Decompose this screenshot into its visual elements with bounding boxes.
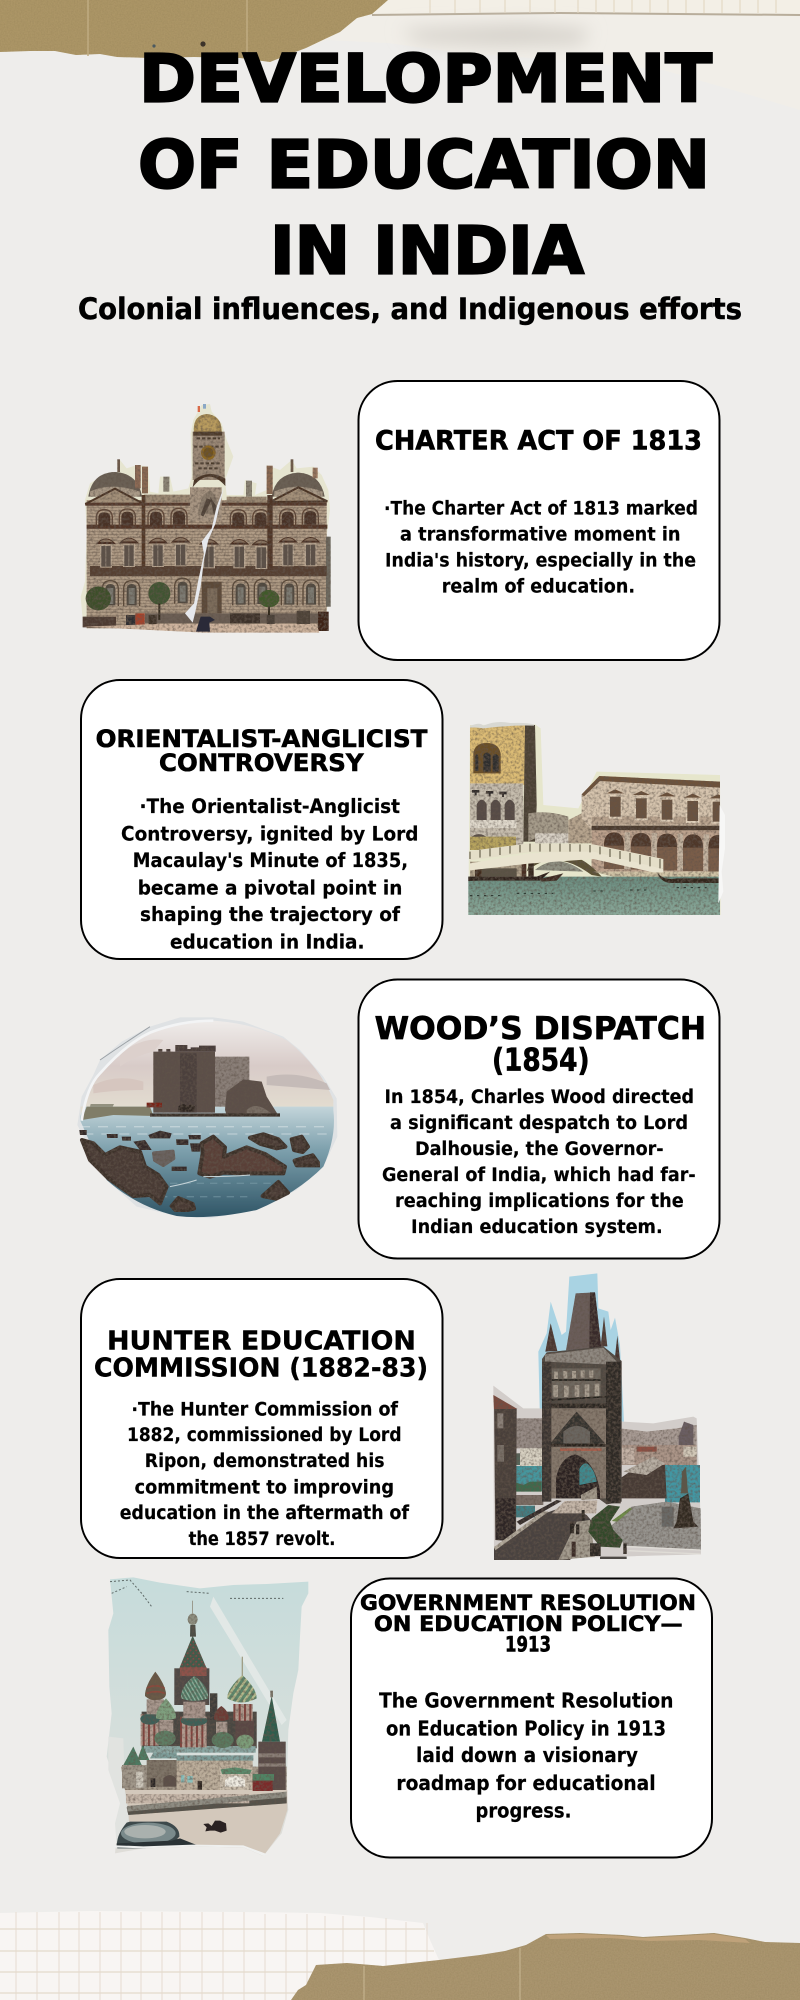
heading: Charter Act: CHARTER ACT OF 1813 (375, 426, 702, 456)
heading: Orientalist-Anglicist: CONTROVERSY (159, 749, 364, 777)
body text: Charter Act (384, 498, 698, 597)
panel: Orientalist-Anglicist Controversy (81, 680, 442, 959)
body text: Hunter Commission: 1882, commissioned by Lord (127, 1425, 402, 1446)
heading: Wood's Dispatch: (1854) (492, 1043, 590, 1079)
photo: sea fortress in torn oval (77, 1017, 337, 1218)
panel: Charter Act of 1813 (358, 381, 720, 660)
panel: Wood's Dispatch (358, 980, 720, 1258)
body text: Hunter Commission: commitment to improving (135, 1477, 394, 1498)
body text: Wood's Dispatch: Dalhousie, the Governor- (415, 1139, 664, 1160)
heading: Wood's Dispatch: WOOD’S DISPATCH (375, 1011, 706, 1047)
body text: Orientalist-Anglicist: Macaulay's Minute of 1835, (133, 849, 408, 872)
heading: Government Resolution: ON EDUCATION POLICY— (374, 1612, 683, 1637)
title: DEVELOPMENT (139, 40, 712, 118)
body text: Orientalist-Anglicist: education in India. (170, 930, 364, 953)
body text: Charter Act: ·The Charter Act of 1813 marked (384, 498, 698, 519)
body text: Orientalist-Anglicist: shaping the trajectory of (140, 903, 400, 926)
torn cardboard: top left (0, 0, 388, 62)
body text: Orientalist-Anglicist: became a pivotal point in (138, 876, 402, 899)
body text: Government Resolution: laid down a visionary (416, 1743, 638, 1767)
heading: Wood's Dispatch (375, 1011, 706, 1079)
body text: Charter Act: India's history, especially in the (385, 550, 696, 571)
heading: Hunter Commission: HUNTER EDUCATION (107, 1326, 416, 1356)
heading: Government Resolution: 1913 (505, 1633, 551, 1658)
torn cardboard: bottom right (291, 1933, 800, 2000)
photo: Prague bridge tower (493, 1273, 701, 1560)
body text: Charter Act: a transformative moment in (400, 524, 680, 545)
subtitle: Colonial influences, and Indigenous efforts (78, 292, 742, 326)
heading: Orientalist-Anglicist: ORIENTALIST-ANGLICIST (96, 725, 428, 753)
torn grid paper: bottom left (0, 1911, 440, 2000)
panel: Government Resolution 1913 (351, 1578, 712, 1858)
body text: Government Resolution: roadmap for educational (396, 1771, 656, 1795)
body text: Hunter Commission: education in the aftermath of (120, 1503, 410, 1524)
body text: Charter Act: realm of education. (442, 576, 635, 597)
body text: Wood's Dispatch: reaching implications for the (395, 1191, 684, 1212)
heading: Hunter Commission: COMMISSION (1882-83) (94, 1353, 428, 1383)
body text: Wood's Dispatch: In 1854, Charles Wood directed (384, 1087, 694, 1108)
body text: Orientalist-Anglicist: ·The Orientalist-Anglicist (140, 795, 400, 818)
body text: Wood's Dispatch (382, 1087, 696, 1238)
heading: Government Resolution: GOVERNMENT RESOLUTION (360, 1591, 696, 1616)
photo: St Basil's cathedral on torn card (107, 1577, 308, 1856)
heading: Hunter Commission (94, 1326, 428, 1383)
body text: Hunter Commission: ·The Hunter Commission of (131, 1400, 399, 1420)
body text: Government Resolution: on Education Policy in 1913 (386, 1716, 666, 1740)
title: IN INDIA (270, 212, 584, 290)
body text: Hunter Commission: the 1857 revolt. (189, 1529, 335, 1550)
body text: Government Resolution: The Government Resolution (379, 1689, 674, 1713)
photo: city hall building (81, 404, 331, 633)
title (138, 40, 712, 290)
heading: Orientalist-Anglicist (96, 725, 428, 777)
body text: Hunter Commission (120, 1400, 410, 1550)
body text: Wood's Dispatch: Indian education system. (411, 1217, 663, 1238)
body text: Government Resolution: progress. (476, 1799, 571, 1823)
heading: Government Resolution (360, 1591, 696, 1658)
body text: Hunter Commission: Ripon, demonstrated his (145, 1451, 384, 1472)
body text: Wood's Dispatch: a significant despatch to Lord (390, 1113, 688, 1134)
body text: Orientalist-Anglicist (121, 795, 418, 953)
body text: Government Resolution (379, 1689, 674, 1823)
torn paper: top right (300, 0, 800, 110)
panel: Hunter Education Commission (81, 1279, 442, 1558)
photo: Venice bridge and palace (468, 722, 734, 915)
body text: Wood's Dispatch: General of India, which had far- (382, 1165, 696, 1186)
title: OF EDUCATION (138, 126, 710, 204)
body text: Orientalist-Anglicist: Controversy, ignited by Lord (121, 822, 418, 845)
